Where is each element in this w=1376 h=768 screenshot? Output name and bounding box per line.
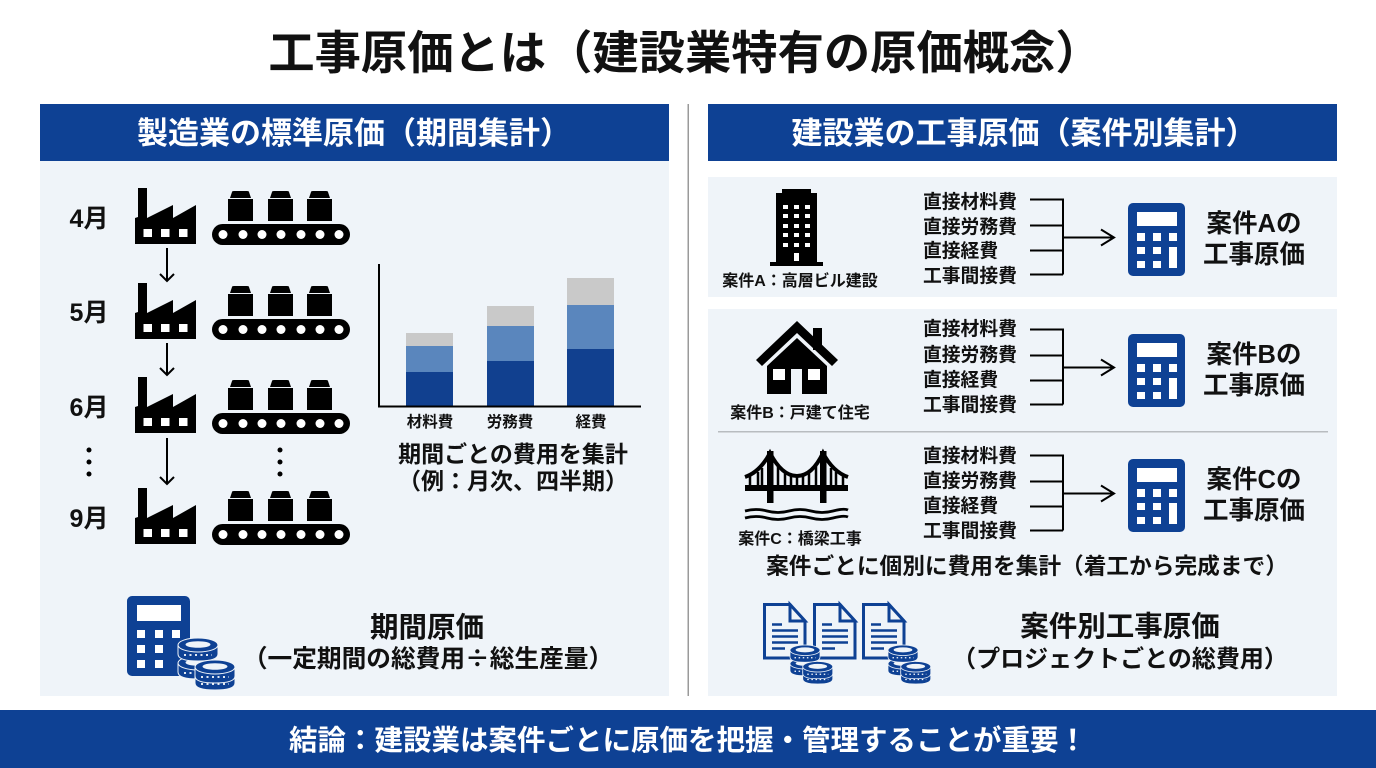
panel heading: manufacturing: 製造業の標準原価（期間集計） <box>137 116 571 151</box>
cost items C: 直接経費 <box>923 495 998 516</box>
month labels: 4月 <box>70 205 108 233</box>
result C: 案件Cの <box>1207 466 1301 494</box>
cost items B: 直接労務費 <box>923 344 1017 365</box>
conclusion bar <box>0 710 1376 768</box>
icon: suspension bridge <box>745 451 848 520</box>
stacked bar chart: 材料費 <box>407 412 453 431</box>
result B: 工事原価 <box>1203 372 1305 400</box>
result: period cost: 期間原価 <box>370 612 484 644</box>
cost items A: 直接労務費 <box>923 216 1017 237</box>
month labels: 6月 <box>70 394 108 422</box>
cost items C <box>923 445 1017 541</box>
chart caption: 期間ごとの費用を集計 <box>398 441 628 467</box>
ellipsis dots <box>86 448 282 476</box>
result: per-project cost: （プロジェクトごとの総費用） <box>952 645 1288 673</box>
chart caption: （例：月次、四半期） <box>398 468 628 494</box>
cost items B: 工事間接費 <box>923 394 1017 415</box>
cost items C: 直接材料費 <box>923 445 1017 466</box>
icon: calculator A <box>1128 203 1185 276</box>
cost items A <box>923 191 1017 286</box>
stacked bar chart <box>379 264 641 431</box>
result: per-project cost: 案件別工事原価 <box>1020 611 1220 643</box>
stacked bar chart: 労務費 <box>487 413 533 431</box>
icon: documents and coins <box>764 604 931 684</box>
month labels: 9月 <box>70 505 108 533</box>
icon: high-rise building <box>770 189 823 266</box>
panel: project A <box>708 177 1337 297</box>
center divider <box>688 104 689 696</box>
icon: house <box>756 321 838 394</box>
cost items A: 工事間接費 <box>923 265 1017 286</box>
month labels: 5月 <box>70 299 108 327</box>
panel heading: manufacturing <box>40 104 669 161</box>
stacked bar chart: 経費 <box>575 413 607 431</box>
result B: 案件Bの <box>1207 341 1301 369</box>
cost items C: 工事間接費 <box>923 520 1017 541</box>
label: project B: 案件B：戸建て住宅 <box>730 403 870 422</box>
cost items A: 直接材料費 <box>923 191 1017 212</box>
month labels <box>70 205 108 533</box>
icon: calculator C <box>1128 459 1185 532</box>
panel: manufacturing standard cost <box>40 104 669 696</box>
icon: calculator B <box>1128 334 1185 407</box>
cost items B <box>923 318 1017 415</box>
result C: 工事原価 <box>1203 497 1305 525</box>
result: period cost <box>243 612 613 675</box>
result C <box>1203 466 1305 525</box>
icon: calculator and coins <box>127 596 235 690</box>
bracket arrow B <box>1030 330 1114 404</box>
label: project C: 案件C：橋梁工事 <box>738 529 862 548</box>
panel: construction cost heading: 建設業の工事原価（案件別集計） <box>792 116 1256 151</box>
result: per-project cost <box>952 611 1288 673</box>
chart caption <box>398 441 628 494</box>
arrows between months <box>160 248 174 484</box>
cost items A: 直接経費 <box>923 240 998 261</box>
cost items B: 直接経費 <box>923 369 998 390</box>
panel: construction cost heading <box>708 104 1337 161</box>
title: 工事原価とは（建設業特有の原価概念） <box>268 27 1102 79</box>
icon: conveyor belts by month <box>212 191 350 545</box>
result A: 工事原価 <box>1203 241 1305 269</box>
icon: factories by month <box>135 188 196 544</box>
summary note: 案件ごとに個別に費用を集計（着工から完成まで） <box>766 553 1288 579</box>
bracket arrow C <box>1030 456 1114 530</box>
bracket arrow A <box>1030 200 1114 274</box>
result B <box>1203 341 1305 400</box>
panel: projects B and C <box>708 309 1337 696</box>
cost items C: 直接労務費 <box>923 470 1017 491</box>
conclusion bar: 結論：建設業は案件ごとに原価を把握・管理することが重要！ <box>289 724 1087 757</box>
result: period cost: （一定期間の総費用÷総生産量） <box>243 639 613 675</box>
cost items B: 直接材料費 <box>923 318 1017 339</box>
label: project A: 案件A：高層ビル建設 <box>722 271 878 290</box>
result A: 案件Aの <box>1207 210 1301 238</box>
result A <box>1203 210 1305 269</box>
